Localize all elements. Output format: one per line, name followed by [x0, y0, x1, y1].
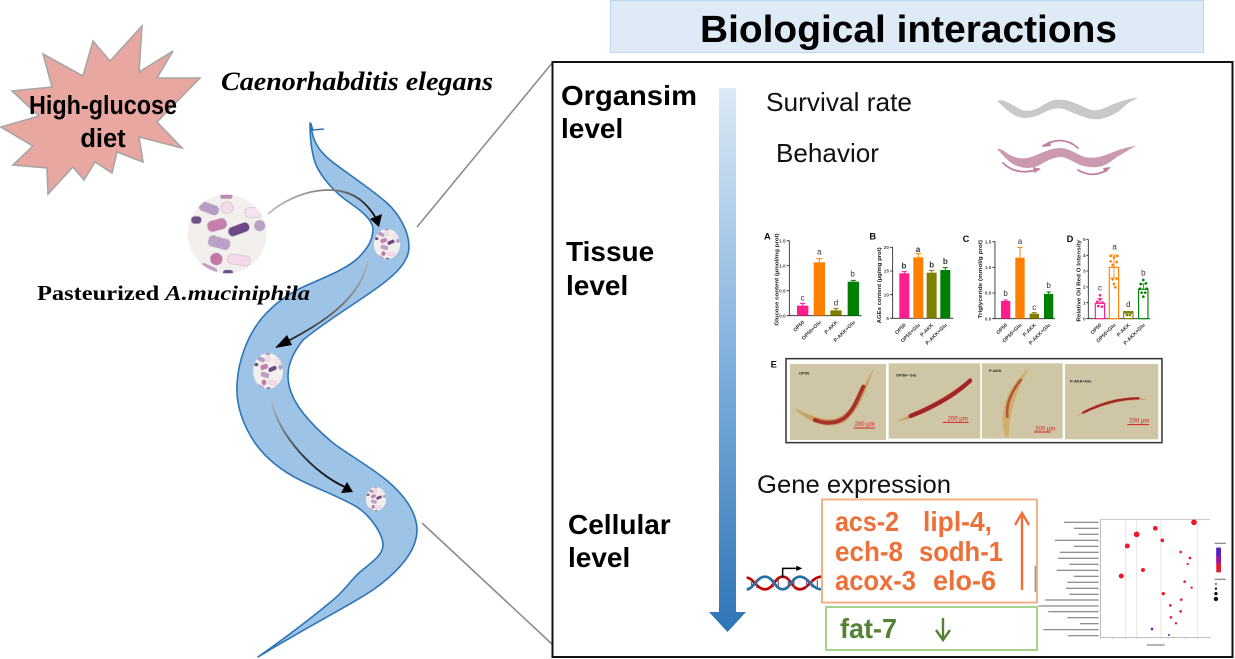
- bar chart: D oil red O intensity: c: [1098, 284, 1102, 293]
- bar chart: C triglyceride: C: [963, 234, 970, 244]
- bar chart: B AGEs content: 20: [884, 245, 889, 250]
- micrographs: E oil red O stained worms: [771, 359, 1162, 443]
- icon: DNA helix with transcription arrow: [747, 566, 822, 589]
- bar chart: C triglyceride: [963, 234, 1055, 346]
- bar chart: A glucose content: A: [764, 231, 771, 241]
- bar chart: D oil red O intensity: 2: [1083, 285, 1086, 290]
- label: Pasteurized A.muciniphila: Pasteurized A.muciniphila: [37, 281, 310, 305]
- bar chart: A glucose content: OP50+Glu: [801, 320, 823, 342]
- bar chart: A glucose content: c: [801, 293, 805, 302]
- panel: down-regulated gene: fat-7: [840, 613, 897, 644]
- arrow: organism to cellular scale: [709, 88, 746, 632]
- connector line: worm to panel, upper: [417, 62, 553, 227]
- bar chart: A glucose content: OP50: [793, 320, 806, 333]
- callout: high-glucose diet burst: High-glucose: [29, 92, 177, 120]
- micrographs: E oil red O stained worms: 200 µm: [855, 422, 875, 428]
- micrographs: E oil red O stained worms: OP50: [799, 371, 810, 376]
- level label: Tissue level: Tissue: [566, 236, 654, 267]
- level label: Cellular level: [568, 509, 671, 573]
- panel: biological interactions frame: [552, 62, 1232, 657]
- text: Survival rate: Survival rate: [766, 87, 912, 117]
- bar chart: C triglyceride: 1.5: [985, 239, 992, 244]
- bar chart: D oil red O intensity: P-AKK+Glu: [1123, 322, 1147, 346]
- bar chart: B AGEs content: OP50: [894, 322, 908, 336]
- title box: Biological interactions: [610, 0, 1204, 52]
- heading: Caenorhabditis elegans: Caenorhabditis elegans: [221, 67, 493, 96]
- bar chart: C triglyceride: OP50+Glu: [1002, 322, 1023, 344]
- bar chart: A glucose content: 1.5: [779, 238, 786, 243]
- panel: up-regulated genes: elo-6: [933, 565, 996, 596]
- bar chart: A glucose content: 0.5: [779, 288, 786, 293]
- bar chart: C triglyceride: Triglyceride (mmol/g prot): [978, 240, 984, 319]
- bar chart: C triglyceride: 0.5: [985, 291, 992, 296]
- bar chart: C triglyceride: b: [1046, 281, 1051, 290]
- bar chart: D oil red O intensity: OP50: [1090, 322, 1103, 336]
- panel: down-regulated gene: [826, 607, 1037, 650]
- bar chart: B AGEs content: P-AKK+Glu: [925, 322, 949, 346]
- bar chart: D oil red O intensity: D: [1067, 234, 1074, 244]
- worm body: [237, 123, 417, 657]
- bar chart: B AGEs content: OP50+Glu: [900, 322, 922, 344]
- bar chart: C triglyceride: OP50: [995, 322, 1009, 336]
- micrographs: E oil red O stained worms: E: [771, 360, 777, 370]
- bar chart: A glucose content: Glucose content (µmol/mg prot): [774, 233, 780, 326]
- micrographs: E oil red O stained worms: P-AKK: [989, 368, 1002, 373]
- bar chart: D oil red O intensity: OP50+Glu: [1096, 322, 1117, 344]
- bar chart: C triglyceride: a: [1018, 237, 1023, 246]
- bar chart: D oil red O intensity: 1: [1083, 300, 1086, 305]
- level label: Tissue level: [566, 236, 654, 301]
- icon: Pasteurized A. muciniphila bacteria circle: [188, 193, 266, 277]
- bar chart: D oil red O intensity: 4: [1083, 253, 1086, 258]
- panel: up-regulated genes: [822, 500, 1037, 602]
- icon: pink moving worm: [997, 141, 1136, 174]
- bar chart: B AGEs content: 5: [886, 316, 889, 321]
- bar chart: C triglyceride: 1.0: [985, 265, 992, 270]
- panel: up-regulated genes: ech-8: [835, 536, 903, 567]
- level label: Cellular level: level: [568, 542, 630, 573]
- callout: high-glucose diet burst: [1, 26, 200, 194]
- level label: Organism level: level: [561, 113, 623, 144]
- bar chart: A glucose content: P-AKK: [824, 320, 840, 336]
- arrow: down-regulation: [936, 618, 950, 640]
- callout: high-glucose diet burst: diet: [80, 125, 126, 153]
- icon: gray worm: [998, 98, 1137, 119]
- arrow: up-regulation: [1015, 513, 1029, 590]
- bar chart: D oil red O intensity: b: [1141, 269, 1146, 278]
- bar chart: B AGEs content: 15: [884, 269, 889, 274]
- bar chart: B AGEs content: 10: [884, 292, 889, 297]
- text: Gene expression: Gene expression: [757, 471, 951, 499]
- level label: Organism level: Organsim: [561, 80, 697, 111]
- bar chart: A glucose content: b: [850, 270, 855, 279]
- panel: up-regulated genes: acs-2: [835, 506, 899, 537]
- bar chart: B AGEs content: AGEs content (µg/mg prot): [877, 247, 883, 323]
- connector line: worm to panel, lower: [422, 523, 553, 645]
- bar chart: B AGEs content: P-AKK: [919, 322, 935, 338]
- bar chart: C triglyceride: 0.0: [985, 316, 992, 321]
- bar chart: D oil red O intensity: 0: [1083, 316, 1086, 321]
- bar chart: A glucose content: [764, 231, 862, 344]
- bar chart: C triglyceride: b: [1003, 289, 1008, 298]
- icon: bacteria in upper gut: [374, 228, 400, 260]
- bar chart: B AGEs content: a: [916, 245, 921, 254]
- bar chart: D oil red O intensity: 5: [1083, 237, 1086, 242]
- bar chart: D oil red O intensity: P-AKK: [1116, 322, 1132, 338]
- level label: Organism level: [561, 80, 697, 144]
- bar chart: A glucose content: 1.0: [779, 263, 786, 268]
- panel: up-regulated genes: lipl-4,: [923, 506, 992, 537]
- bar chart: B AGEs content: [869, 231, 953, 346]
- bar chart: C triglyceride: P-AKK: [1022, 322, 1038, 338]
- micrographs: E oil red O stained worms: OP50+ Glu: [896, 372, 917, 377]
- panel: up-regulated genes: sodh-1: [919, 536, 1003, 567]
- bar chart: B AGEs content: B: [869, 231, 876, 241]
- bar chart: D oil red O intensity: Relative Oil Red O Intensity: [1077, 239, 1083, 322]
- bar chart: B AGEs content: b: [929, 260, 934, 269]
- bar chart: C triglyceride: P-AKK+Glu: [1028, 322, 1052, 346]
- bar chart: A glucose content: d: [834, 299, 838, 308]
- icon: bacteria in middle gut: [253, 352, 283, 390]
- bar chart: C triglyceride: c: [1032, 303, 1036, 312]
- bar chart: A glucose content: P-AKK+Glu: [833, 320, 857, 344]
- bar chart: A glucose content: 0.0: [779, 313, 786, 318]
- bar chart: D oil red O intensity: [1067, 234, 1150, 346]
- arrow: gut passage to lower: [272, 402, 353, 493]
- level label: Cellular level: Cellular: [568, 509, 671, 540]
- micrographs: E oil red O stained worms: 200 µm: [1129, 419, 1149, 425]
- text: Behavior: Behavior: [776, 138, 879, 168]
- bar chart: D oil red O intensity: a: [1112, 242, 1117, 251]
- micrographs: E oil red O stained worms: P-AKK+Glu: [1070, 379, 1092, 384]
- bar chart: B AGEs content: b: [943, 257, 948, 266]
- chart: KEGG enrichment dot plot: [1035, 519, 1226, 646]
- micrographs: E oil red O stained worms: 200 µm: [1035, 426, 1055, 432]
- micrographs: E oil red O stained worms: 200 µm: [948, 417, 968, 423]
- bar chart: D oil red O intensity: d: [1126, 300, 1131, 309]
- icon: bacteria in lower gut: [366, 487, 386, 512]
- arrow: gut passage to middle: [275, 261, 368, 348]
- bar chart: A glucose content: a: [817, 248, 822, 257]
- bar chart: B AGEs content: b: [902, 261, 907, 270]
- title box: Biological interactions: Biological interactions: [700, 9, 1117, 51]
- arrow: bacteria intake: [268, 190, 382, 227]
- level label: Tissue level: level: [566, 270, 628, 301]
- bar chart: D oil red O intensity: 3: [1083, 269, 1086, 274]
- panel: up-regulated genes: acox-3: [835, 565, 916, 596]
